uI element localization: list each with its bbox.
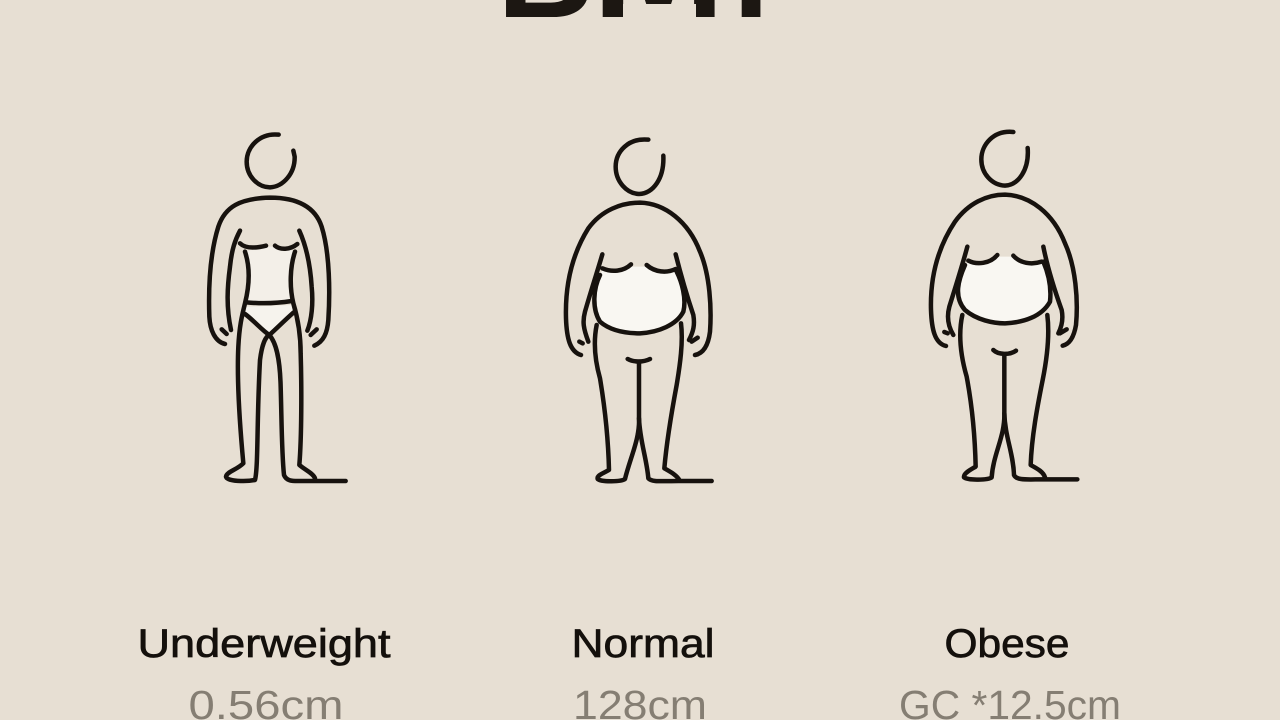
figure: underweight <box>209 134 346 481</box>
label: obese: Obese <box>944 622 1070 666</box>
figure: normal <box>566 139 712 481</box>
figure: obese <box>931 132 1077 480</box>
label: underweight: Underweight <box>138 622 390 666</box>
label: normal: Normal <box>572 622 714 666</box>
